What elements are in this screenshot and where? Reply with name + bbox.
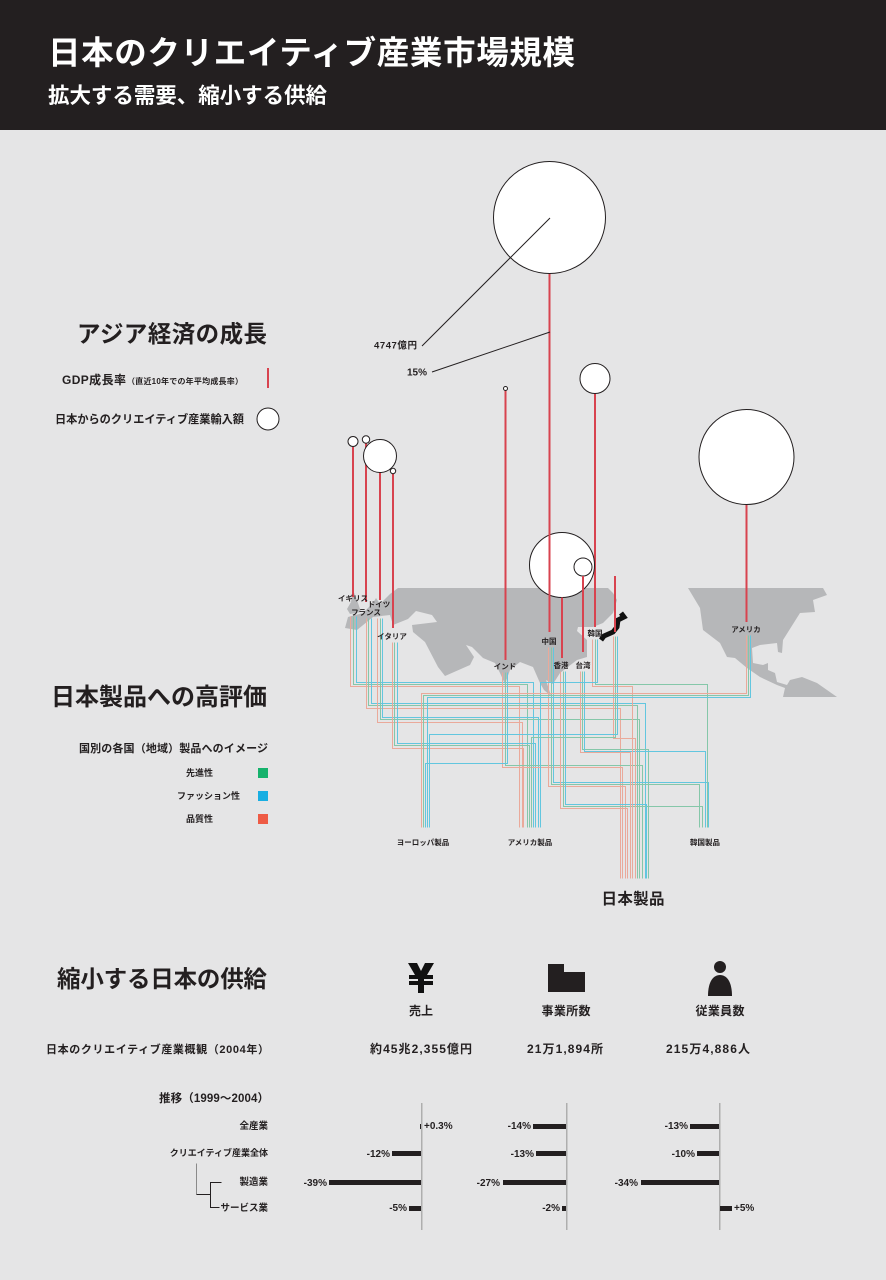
value: establishments: 21万1,894所 bbox=[527, 1042, 603, 1056]
country labels: 台湾 bbox=[576, 660, 591, 670]
chart: sales trend: -5% bbox=[389, 1203, 407, 1214]
icon: yen bbox=[408, 963, 434, 993]
row labels: 全産業 bbox=[239, 1120, 268, 1132]
chart: sales trend: -39% bbox=[304, 1178, 327, 1189]
routes: Italy bbox=[392, 642, 536, 828]
country labels: イギリス bbox=[338, 594, 368, 603]
chart: establishments trend: -27% bbox=[477, 1178, 500, 1189]
product label: Europe: ヨーロッパ製品 bbox=[397, 837, 449, 847]
legend: GDP growth: GDP成長率 bbox=[62, 372, 126, 387]
circle: Germany bbox=[364, 440, 396, 472]
leader label: amount: 4747億円 bbox=[374, 340, 417, 352]
legend: fashion bbox=[177, 790, 268, 801]
label: sales: 売上 bbox=[409, 1003, 433, 1018]
country labels: フランス bbox=[351, 608, 381, 617]
heading: shrinking supply: 縮小する日本の供給 bbox=[57, 966, 268, 992]
country labels: インド bbox=[494, 662, 516, 671]
row labels bbox=[170, 1120, 268, 1214]
legend: GDP growth: （直近10年での年平均成長率） bbox=[127, 376, 243, 386]
chart: establishments trend: -14% bbox=[508, 1121, 531, 1132]
legend: fashion: ファッション性 bbox=[177, 790, 240, 801]
header band bbox=[0, 0, 886, 130]
icon: Japan on map bbox=[601, 613, 624, 640]
routes: France bbox=[366, 618, 646, 878]
legend: quality: 品質性 bbox=[186, 813, 213, 824]
icon: person bbox=[708, 961, 732, 996]
chart: employees trend: -10% bbox=[672, 1149, 695, 1160]
subtitle: 拡大する需要、縮小する供給 bbox=[48, 84, 327, 108]
circle: India bbox=[504, 386, 508, 390]
chart: establishments trend: -13% bbox=[511, 1149, 534, 1160]
circle: Korea bbox=[580, 364, 610, 394]
map: North America bbox=[688, 588, 837, 697]
title: 日本のクリエイティブ産業市場規模 bbox=[48, 34, 575, 71]
heading: high evaluation: 日本製品への高評価 bbox=[51, 684, 267, 711]
legend title: 国別の各国（地域）製品へのイメージ bbox=[79, 741, 268, 755]
country labels: ドイツ bbox=[368, 600, 390, 609]
routes: Germany bbox=[378, 618, 640, 878]
legend: imports bbox=[55, 408, 279, 430]
leader label: rate: 15% bbox=[407, 368, 427, 378]
legend: imports: 日本からのクリエイティブ産業輸入額 bbox=[55, 412, 245, 426]
chart: sales trend: -12% bbox=[367, 1149, 390, 1160]
circle: Taiwan bbox=[574, 558, 592, 576]
red growth rate lines bbox=[353, 273, 746, 660]
row labels: 製造業 bbox=[239, 1176, 268, 1188]
country labels bbox=[338, 594, 761, 671]
routes: Hong Kong bbox=[560, 672, 702, 878]
leader lines bbox=[422, 218, 550, 372]
trend title: 推移（1999〜2004） bbox=[159, 1091, 269, 1105]
country labels: イタリア bbox=[377, 631, 407, 641]
circle: America bbox=[699, 410, 794, 504]
label: employees: 従業員数 bbox=[696, 1003, 744, 1018]
country labels: 香港 bbox=[554, 660, 569, 670]
routes: Korea bbox=[540, 640, 708, 878]
overview label: 日本のクリエイティブ産業概観（2004年） bbox=[46, 1042, 269, 1056]
circle: Hong Kong bbox=[530, 532, 594, 598]
row labels: クリエイティブ産業全体 bbox=[170, 1147, 268, 1158]
chart: sales trend: +0.3% bbox=[424, 1121, 453, 1132]
red line redraw over circles bbox=[550, 274, 583, 658]
routes: India bbox=[426, 672, 642, 878]
world map bbox=[345, 588, 837, 697]
routes: China bbox=[548, 648, 708, 878]
product label: America: アメリカ製品 bbox=[508, 837, 552, 847]
circle: France bbox=[362, 436, 370, 443]
circle: UK bbox=[348, 436, 358, 446]
import circles bbox=[348, 162, 794, 598]
country labels: アメリカ bbox=[731, 625, 761, 634]
legend: GDP growth bbox=[62, 368, 269, 388]
product label: Korea: 韓国製品 bbox=[690, 837, 720, 847]
chart: employees trend: +5% bbox=[734, 1203, 754, 1214]
chart: employees trend bbox=[615, 1103, 754, 1230]
legend: advanced: 先進性 bbox=[186, 767, 213, 778]
chart: employees trend: -34% bbox=[615, 1178, 638, 1189]
value: sales: 約45兆2,355億円 bbox=[370, 1041, 472, 1056]
chart: establishments trend: -2% bbox=[542, 1203, 560, 1214]
heading: Asia growth: アジア経済の成長 bbox=[77, 321, 267, 347]
map: Eurasia bbox=[345, 588, 617, 696]
circle: Italy bbox=[390, 468, 396, 474]
map: Britain bbox=[347, 590, 361, 614]
routes: Japan bbox=[430, 636, 636, 878]
tree connector bbox=[196, 1164, 222, 1208]
value: employees: 215万4,886人 bbox=[666, 1042, 750, 1056]
country labels: 中国 bbox=[542, 636, 556, 646]
routes: Taiwan bbox=[580, 672, 706, 878]
legend: quality bbox=[186, 813, 268, 824]
circle: China bbox=[494, 162, 606, 274]
chart: establishments trend bbox=[477, 1103, 568, 1230]
label: establishments: 事業所数 bbox=[542, 1003, 590, 1018]
row labels: サービス業 bbox=[220, 1202, 268, 1214]
country labels: 韓国 bbox=[588, 628, 602, 638]
import routing lines bbox=[350, 616, 750, 878]
icon: folder bbox=[548, 964, 585, 992]
chart: employees trend: -13% bbox=[665, 1121, 688, 1132]
routes: America bbox=[422, 636, 750, 828]
chart: sales trend bbox=[304, 1103, 453, 1230]
legend: advanced bbox=[186, 767, 268, 778]
product label: Japan: 日本製品 bbox=[602, 890, 664, 908]
routes: UK bbox=[350, 616, 534, 828]
